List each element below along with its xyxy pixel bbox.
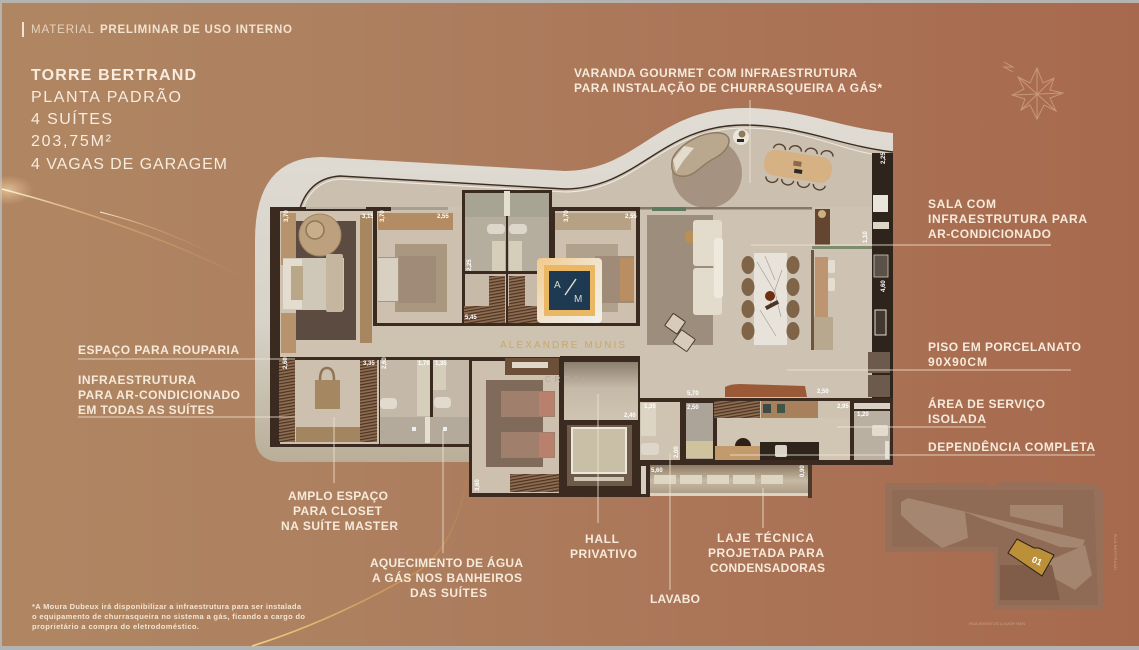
callout: aquecimento: A GÁS NOS BANHEIROS — [372, 570, 522, 585]
watermark: ALEXANDRE MUNIS — [500, 340, 625, 351]
footnote — [32, 602, 305, 631]
callout: lavabo: LAVABO — [650, 592, 700, 606]
exterior walls top — [270, 207, 374, 447]
header: document notice — [22, 22, 292, 37]
callout: infraestrutura suites — [78, 373, 240, 417]
lower baths — [380, 357, 469, 444]
title block: 4 VAGAS DE GARAGEM — [31, 156, 227, 173]
footnote: o equipamento de churrasqueira no sistema a gás, ficando a cargo do — [32, 612, 305, 621]
callout: hall: HALL — [585, 532, 619, 546]
balcony dining table — [761, 141, 835, 191]
maid room: 2,50 — [687, 405, 699, 411]
private hall and elevators — [560, 356, 640, 497]
suite 4 — [469, 357, 565, 497]
callout: closet — [281, 489, 398, 533]
callout: infraestrutura suites: EM TODAS AS SUÍTES — [78, 402, 214, 417]
callout: dependencia: DEPENDÊNCIA COMPLETA — [928, 439, 1095, 454]
balcony lounge — [672, 129, 749, 208]
callout: sala: SALA COM — [928, 197, 996, 211]
site location map: 01 — [1030, 554, 1044, 568]
suite 3: 3,70 — [564, 210, 570, 222]
closet: 2,60 — [283, 357, 289, 369]
callout: closet: NA SUÍTE MASTER — [281, 518, 398, 533]
suite 2 — [373, 207, 463, 326]
title block: TORRE BERTRAND — [31, 67, 196, 84]
site location map — [885, 482, 1118, 626]
callout: hall: PRIVATIVO — [570, 547, 637, 561]
callout: area de servico — [928, 396, 1045, 426]
balcony floor — [300, 125, 893, 465]
callout: piso: PISO EM PORCELANATO — [928, 340, 1081, 354]
lower baths: 2,60 — [382, 357, 388, 369]
suite 1 master: 3,70 — [284, 210, 290, 222]
logo — [537, 258, 602, 323]
header: document notice: MATERIAL — [31, 24, 95, 36]
callout: infraestrutura suites: PARA AR-CONDICIONADO — [78, 388, 240, 402]
kitchen wall: 4,60 — [881, 280, 887, 292]
suite 2: 3,70 — [380, 210, 386, 222]
lavabo — [640, 398, 680, 465]
callout: closet: AMPLO ESPAÇO — [288, 489, 388, 503]
watermark: CRECI — [545, 375, 585, 384]
callout: piso: 90X90CM — [928, 355, 987, 369]
callout: aquecimento: AQUECIMENTO DE ÁGUA — [370, 555, 523, 570]
interior floor base — [270, 207, 892, 465]
dependency: 1,20 — [857, 412, 869, 418]
title block: PLANTA PADRÃO — [31, 86, 181, 106]
suite baths: 2,25 — [467, 259, 473, 271]
title block: 4 SUÍTES — [31, 109, 112, 128]
callout: varanda gourmet — [574, 66, 882, 95]
dependency — [837, 398, 893, 465]
suite baths: 5,45 — [465, 315, 477, 321]
closet: 3,35 — [363, 361, 375, 367]
lower baths: 1,35 — [435, 361, 447, 367]
site location map: RUA BERTRAND — [1113, 534, 1118, 570]
lower baths: 1,70 — [418, 361, 430, 367]
watermark — [500, 340, 625, 384]
callout: closet: PARA CLOSET — [293, 504, 383, 518]
closet — [270, 357, 379, 444]
callout: varanda gourmet: PARA INSTALAÇÃO DE CHURRASQUEIRA A GÁS* — [574, 80, 882, 95]
kitchen wall: 2,25 — [881, 152, 887, 164]
logo: M — [574, 294, 582, 305]
callout: aquecimento — [370, 555, 523, 600]
service area — [680, 384, 860, 461]
callout: area de servico: ÁREA DE SERVIÇO — [928, 396, 1045, 411]
callout: laje tecnica: LAJE TÉCNICA — [717, 530, 814, 545]
callout: sala: INFRAESTRUTURA PARA — [928, 212, 1087, 226]
callout: sala: AR-CONDICIONADO — [928, 227, 1051, 241]
private hall and elevators: 2,40 — [624, 413, 636, 419]
suite 3: 2,55 — [625, 214, 637, 220]
logo: A — [554, 280, 561, 291]
maid room — [680, 398, 717, 464]
technical slab: 5,60 — [651, 468, 663, 474]
callout: laje tecnica: PROJETADA PARA — [708, 546, 824, 560]
balcony outer band — [255, 108, 893, 462]
technical slab — [640, 465, 812, 498]
icon: compass star — [1004, 62, 1063, 119]
callout: piso — [928, 340, 1081, 369]
dependency: 2,95 — [837, 404, 849, 410]
kitchen wall: 1,10 — [863, 231, 869, 243]
callout: area de servico: ISOLADA — [928, 412, 986, 426]
service area: 5,70 — [687, 391, 699, 397]
suite 2: 2,55 — [437, 214, 449, 220]
bottom wall — [640, 460, 893, 465]
callout: infraestrutura suites: INFRAESTRUTURA — [78, 373, 196, 387]
technical slab: 0,90 — [800, 465, 806, 477]
header: document notice: PRELIMINAR DE USO INTERNO — [100, 24, 292, 36]
callout: laje tecnica — [708, 530, 825, 575]
callout: sala — [928, 197, 1087, 241]
title block — [31, 67, 227, 173]
living room — [640, 207, 872, 398]
floor plan — [255, 108, 893, 498]
suite baths — [462, 190, 552, 326]
suite 4: 3,60 — [475, 479, 481, 491]
highlighted tower — [1008, 539, 1054, 576]
site location map: RUA EVENTOS LOUGH RAN — [969, 621, 1025, 626]
suite 1 master — [280, 210, 374, 357]
lavabo: 1,35 — [644, 404, 656, 410]
footnote: proprietário a compra do eletrodoméstico. — [32, 622, 199, 631]
service area: 2,50 — [817, 389, 829, 395]
title block: 203,75M² — [31, 133, 112, 150]
lavabo: 2,00 — [674, 446, 680, 458]
callout: hall — [570, 532, 637, 561]
callout: aquecimento: DAS SUÍTES — [410, 585, 487, 600]
kitchen wall — [863, 152, 893, 465]
leader lines — [78, 100, 1095, 590]
callout: rouparia: ESPAÇO PARA ROUPARIA — [78, 343, 239, 357]
callout: laje tecnica: CONDENSADORAS — [710, 561, 825, 575]
suite 3 — [552, 207, 640, 326]
suite 1 master: 3,15 — [362, 214, 374, 220]
footnote: *A Moura Dubeux irá disponibilizar a infraestrutura para ser instalada — [32, 602, 302, 611]
callout: varanda gourmet: VARANDA GOURMET COM INFRAESTRUTURA — [574, 66, 857, 80]
